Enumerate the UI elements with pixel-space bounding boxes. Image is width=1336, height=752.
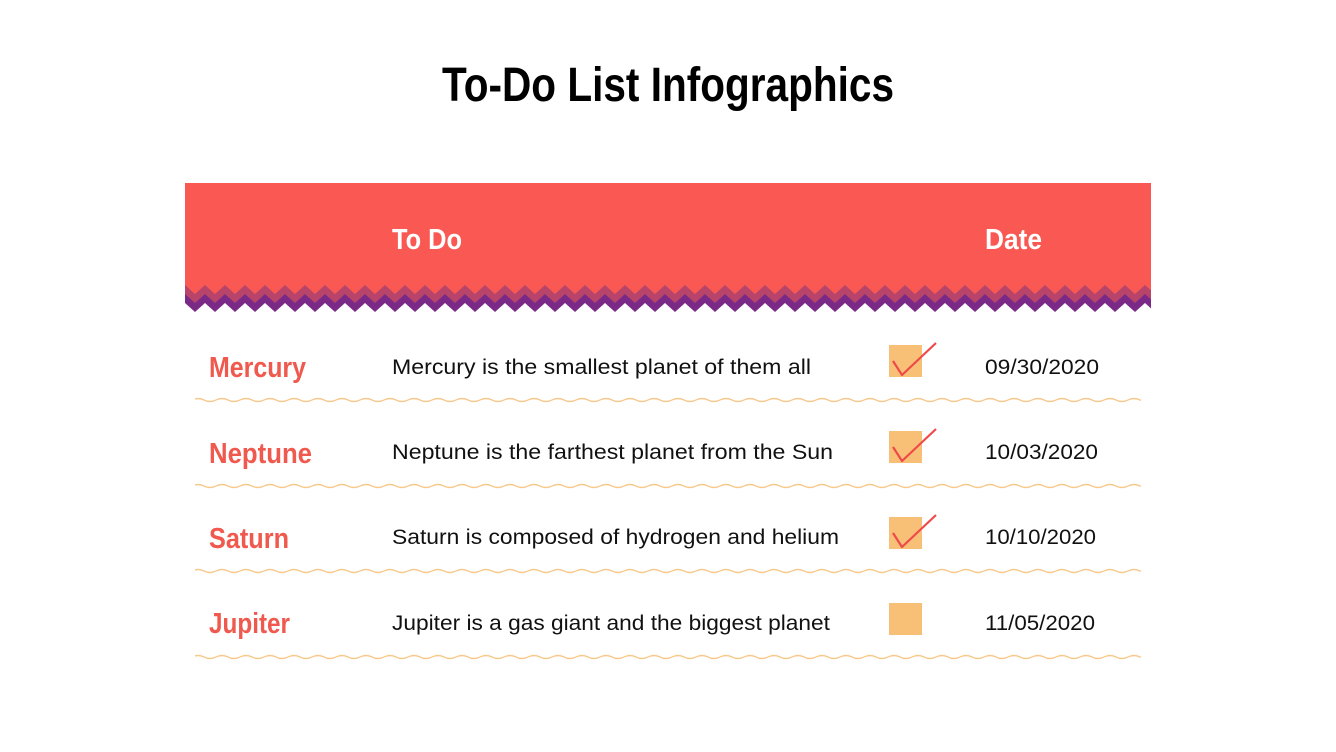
header label: Date: Date [985, 224, 1042, 256]
row: Mercury: Mercury [209, 352, 306, 384]
row: Jupiter: Jupiter is a gas giant and the biggest planet [392, 612, 830, 635]
row: Neptune: Neptune [209, 438, 312, 470]
header label: To Do: To Do [392, 224, 462, 256]
row: Saturn [195, 515, 1141, 576]
row: Saturn: Saturn is composed of hydrogen and helium [392, 526, 839, 549]
row: Saturn: 10/10/2020 [985, 526, 1096, 549]
title: To-Do List Infographics [442, 59, 894, 112]
row: Jupiter: Jupiter [209, 608, 290, 640]
table header [185, 183, 1151, 313]
row: Mercury [195, 343, 1141, 405]
row: Neptune: 10/03/2020 [985, 441, 1098, 464]
row: Neptune [195, 429, 1141, 491]
row: Saturn: Saturn [209, 523, 289, 555]
row: Mercury: Mercury is the smallest planet of them all [392, 356, 811, 379]
row: Mercury: 09/30/2020 [985, 356, 1099, 379]
row: Neptune: Neptune is the farthest planet from the Sun [392, 441, 833, 464]
row: Jupiter [195, 603, 1141, 662]
row: Jupiter: 11/05/2020 [985, 612, 1095, 635]
